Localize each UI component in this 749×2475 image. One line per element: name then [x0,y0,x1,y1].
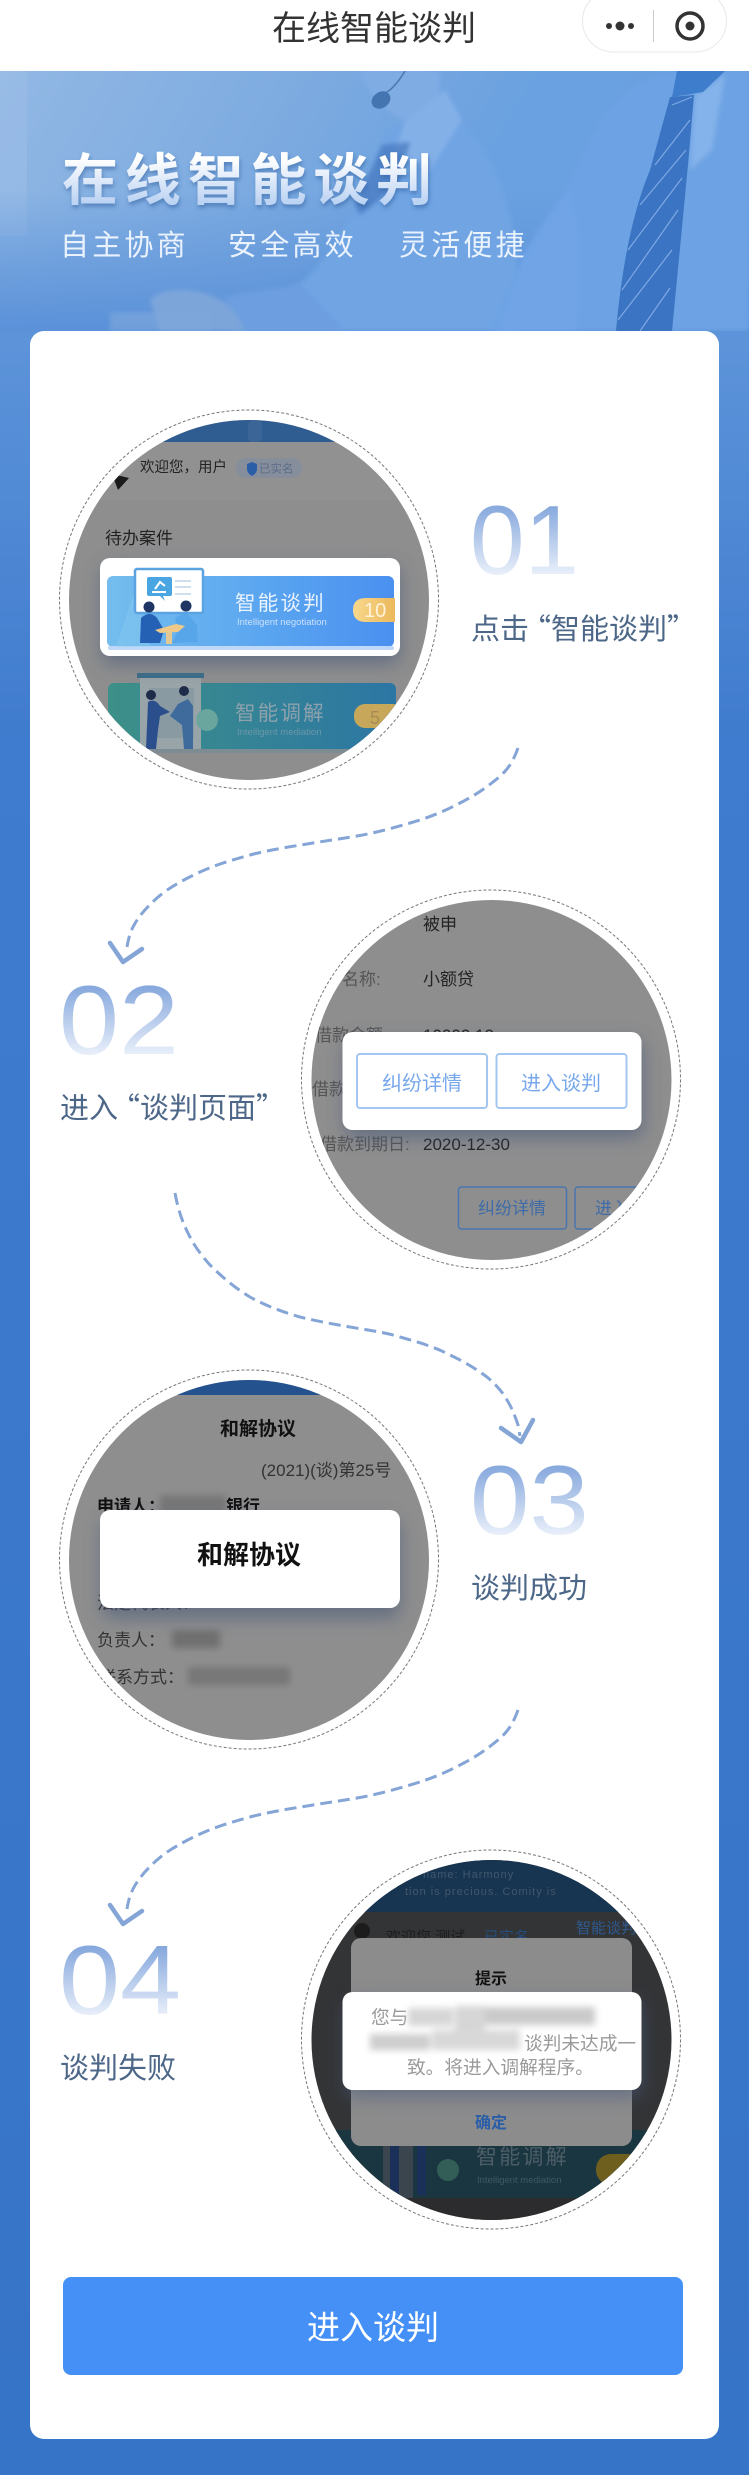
step 4 screenshot circle [300,1850,680,2230]
form fields behind popup: 被申 [423,915,457,934]
grey dialog: 提示 [475,1970,507,1988]
mediation banner (dimmed): Intelligent mediation [237,727,322,738]
mediation banner (dimmed): 智能调解 [235,702,326,725]
agreement document text: 负责人： [97,1631,165,1650]
form fields behind popup: 小额贷 [423,970,474,989]
step 4 label: 谈判失败 [60,2052,176,2085]
popup shadow [102,566,400,664]
form fields behind popup [312,915,510,1154]
step 2 number: 02 [59,966,179,1075]
agreement document text [97,1418,391,1687]
form fields behind popup: 2020-12-30 [423,1135,510,1154]
form fields behind popup: 借款到期日: [320,1135,410,1154]
arrow: step 2 to step 3 [175,1193,533,1442]
enter negotiation button [63,2277,683,2375]
nav title: 在线智能谈判 [272,10,476,48]
dimmed home screen: 智能谈判 [576,1919,636,1937]
hero banner photo: two office workers [0,71,749,331]
highlighted failure message: 您与 [371,2007,408,2028]
dimmed buttons: 纠纷详情 [478,1199,546,1218]
step 3 number: 03 [470,1445,589,1555]
step 2 screenshot circle [300,890,683,1270]
step 2 label: 进入“谈判页面” [60,1085,285,1127]
step 4 screenshot circle: name: Harmony [423,1869,514,1881]
hero subtitle: 安全高效 [228,229,357,262]
step 1 number: 01 [470,485,579,595]
icon: monitor with gavel [135,569,203,613]
agreement document text: 申请人： [97,1496,165,1516]
highlighted negotiation card: 智能谈判 [235,592,326,615]
highlighted negotiation card: Intelligent negotiation [237,617,327,628]
popup shadow [102,1520,400,1618]
highlighted failure message: 致。将进入调解程序。 [407,2057,594,2078]
dimmed home screen: 已实名 [484,1929,529,1946]
icon: two people at a table [140,600,198,644]
count badge [353,598,395,622]
step 1 screenshot circle [60,410,440,790]
highlighted negotiation card [100,558,400,656]
hero subtitle: 灵活便捷 [399,229,528,262]
dimmed home screen [336,1920,648,2220]
section label: 待办案件 [105,529,173,548]
grey dialog [351,1938,632,2146]
step 3 screenshot circle [60,1370,440,1750]
step 4 number: 04 [59,1926,181,2036]
form fields behind popup: 借款 [312,1080,346,1099]
agreement document text: (2021)(谈)第25号 [261,1461,391,1480]
highlighted buttons popup: 纠纷详情 [382,1072,462,1095]
highlighted agreement popup: 和解协议 [197,1540,301,1570]
step 4 screenshot circle: tion is precious. Comity is [405,1886,557,1898]
dimmed buttons: 进入谈判 [595,1199,663,1218]
agreement document text: 联系方式： [99,1668,184,1687]
greeting: 欢迎您，用户 [140,459,227,476]
hero subtitle: 自主协商 [60,229,189,262]
grey dialog: 确定 [475,2113,507,2132]
highlighted buttons popup: 进入谈判 [521,1072,601,1095]
highlighted failure message [342,1992,642,2090]
highlighted failure message: 谈判未达成一 [524,2033,636,2054]
capsule menu button [582,0,726,52]
popup shadow [345,1040,643,1138]
highlighted buttons popup [342,1032,642,1130]
step 3 label: 谈判成功 [471,1572,587,1605]
agreement document text: 和解协议 [220,1418,296,1440]
highlighted agreement popup [100,1510,400,1608]
arrow: step 3 to step 4 [110,1710,518,1924]
highlighted negotiation card: 10 [364,600,386,622]
dimmed buttons [458,1186,637,1230]
step 1 screenshot circle: 已实名 [259,462,294,476]
mediation banner (dimmed): 5 [370,708,380,728]
hero heading: 在线智能谈判 [62,149,439,212]
mediation banner (dimmed) [108,673,404,753]
step 1 label: 点击“智能谈判” [471,606,696,648]
arrow: step 1 to step 2 [110,748,518,962]
form fields behind popup: 名称: [342,970,381,989]
dimmed home screen: 智能调解 [476,2146,569,2169]
redacted blur [370,2006,595,2050]
mini-program nav bar [0,0,749,71]
form fields behind popup: 10000.12 [423,1026,494,1045]
hero subtitle [60,229,528,262]
agreement document text: 银行 [226,1497,260,1516]
enter negotiation button: 进入谈判 [307,2309,439,2346]
dimmed home screen: 欢迎您 测试 [386,1929,465,1946]
white content card [30,331,719,2439]
dimmed home screen: Intelligent mediation [477,2175,562,2186]
agreement document text: 法定代表人： [97,1594,199,1613]
form fields behind popup: 借款金额: [315,1026,388,1045]
popup shadow [345,2000,643,2098]
